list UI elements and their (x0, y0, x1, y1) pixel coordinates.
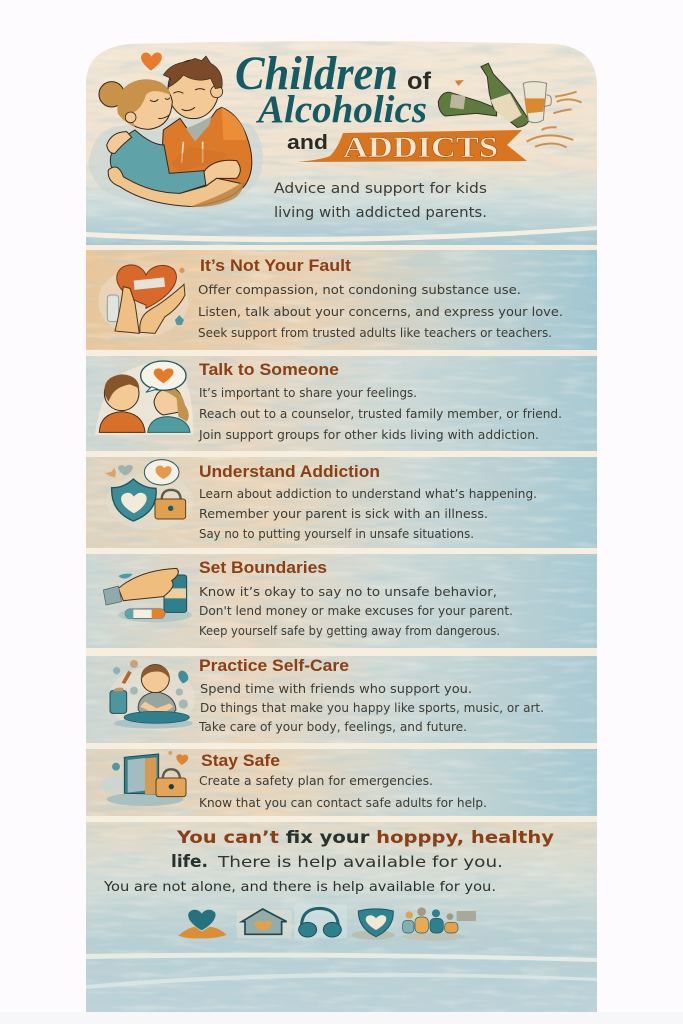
icon: headphones (294, 904, 347, 938)
closing line: not alone: You are not alone, and there is help available for you. (103, 879, 496, 895)
icon: support group (402, 907, 476, 941)
bottom page shadow (0, 1012, 683, 1024)
heading: Stay Safe (201, 752, 280, 770)
girl (99, 82, 124, 107)
heading: Understand Addiction (199, 463, 380, 481)
panel: understand addiction (105, 460, 537, 541)
text block: Reach out to a counselor, trusted family member, or friend. (199, 406, 562, 421)
icon row (178, 904, 476, 941)
panel: talk to someone (95, 361, 562, 442)
icon: home (237, 909, 292, 938)
heading: Practice Self-Care (199, 657, 349, 675)
text block (199, 584, 513, 638)
background card (86, 40, 597, 1015)
title banner (297, 130, 527, 162)
header (88, 47, 582, 221)
text block: Take care of your body, feelings, and future. (198, 719, 467, 734)
icon: shield (352, 909, 395, 940)
text block: Create a safety plan for emergencies. (199, 773, 433, 788)
panel: it's not your fault (98, 257, 563, 340)
text block: Do things that make you happy like sports, music, or art. (200, 700, 544, 715)
text block: Keep yourself safe by getting away from dangerous. (199, 623, 500, 638)
heading: Set Boundaries (199, 559, 327, 577)
text block: Join support groups for other kids living with addiction. (198, 427, 539, 442)
text block: Say no to putting yourself in unsafe situations. (199, 526, 474, 541)
title: and: and (287, 132, 328, 154)
icon: door and lock (101, 751, 188, 806)
illustration: hugging children (88, 52, 263, 210)
panel: practice self-care (108, 657, 544, 734)
heading: It’s Not Your Fault (200, 257, 352, 275)
text block: It’s important to share your feelings. (199, 385, 417, 400)
text block: Remember your parent is sick with an illness. (199, 506, 488, 521)
text block (198, 385, 562, 442)
tagline (274, 181, 487, 221)
panel: stay safe (101, 751, 487, 810)
panel: set boundaries (103, 559, 513, 638)
text block: Don't lend money or make excuses for your parent. (199, 603, 513, 618)
text block: Know that you can contact safe adults for help. (199, 795, 487, 810)
title: Alcoholics: Alcoholics (255, 88, 427, 131)
text block (199, 486, 537, 541)
text block: Offer compassion, not condoning substance use. (198, 282, 521, 297)
text block: Listen, talk about your concerns, and express your love. (198, 304, 563, 319)
icon: child sitting (108, 660, 195, 730)
text block (198, 282, 563, 340)
icon: heart in hands (178, 910, 227, 938)
tagline: Advice and support for kids (274, 181, 487, 197)
icon: heart in hands (98, 265, 188, 337)
title (235, 47, 527, 164)
text block: Learn about addiction to understand what’s happening. (199, 486, 537, 501)
title: of: of (407, 68, 432, 95)
infographic (86, 41, 597, 1012)
text block (198, 681, 544, 734)
tagline: living with addicted parents. (274, 205, 487, 221)
text block: Know it’s okay to say no to unsafe behavior, (199, 584, 497, 599)
illustration: bottles and glass (438, 63, 582, 147)
title: ADDICTS: ADDICTS (343, 131, 498, 164)
title: Children: Children (235, 47, 398, 100)
heading: Talk to Someone (199, 361, 339, 379)
text block: Spend time with friends who support you. (200, 681, 472, 696)
icon: shield and lock (105, 460, 193, 530)
text block: Seek support from trusted adults like teachers or teachers. (198, 325, 552, 340)
text block (199, 773, 487, 810)
icon: heart (141, 52, 162, 71)
closing headline: You can’t fix your hopppy, healthy (176, 828, 554, 848)
closing line: life: life. (171, 852, 208, 872)
icon: hand, bottle and pill (103, 568, 192, 622)
closing line: help available: There is help available for you. (217, 853, 503, 871)
panel: closing message (103, 828, 554, 941)
icon: two kids talking (95, 361, 193, 435)
